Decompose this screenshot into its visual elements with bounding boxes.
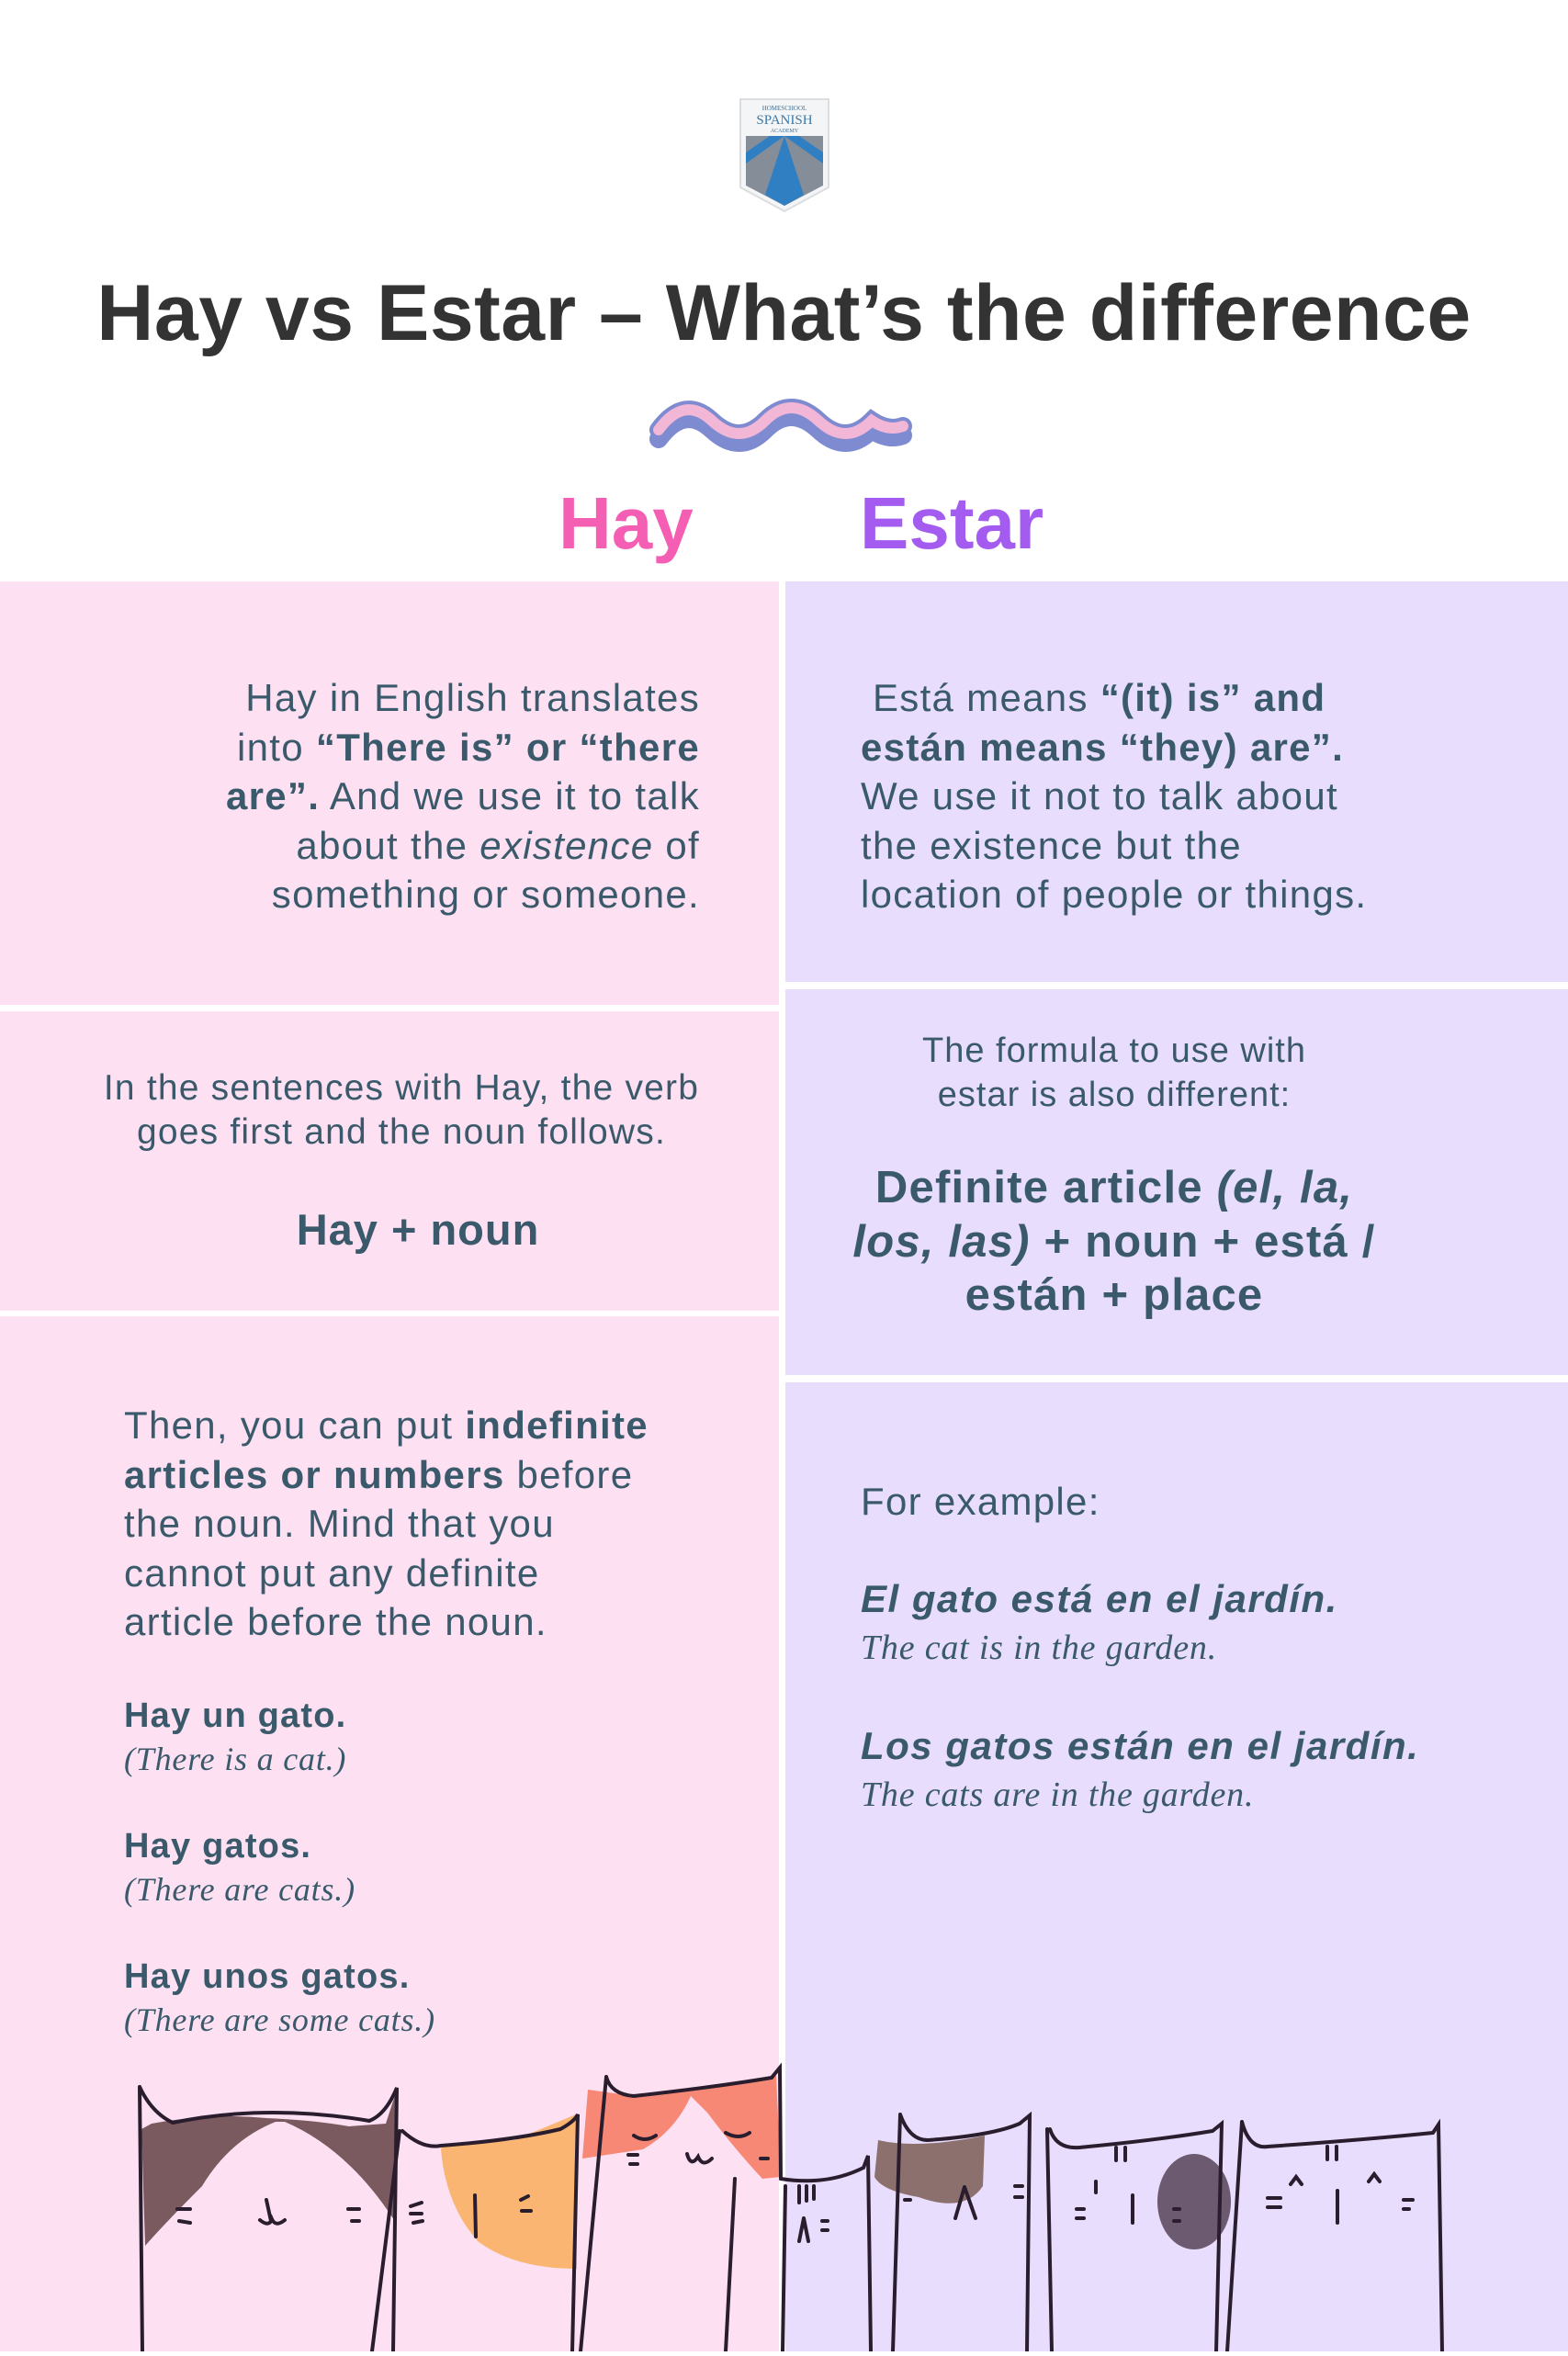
text: formula intro: estar is also different: [938, 1076, 1291, 1114]
cat 3 [582, 2076, 781, 2179]
cat 6 [1157, 2154, 1231, 2249]
example 1: The cat is in the garden. [861, 1629, 1217, 1667]
formula: hay + noun: Hay + noun [297, 1205, 539, 1254]
logo [739, 98, 829, 212]
example 2 [861, 1724, 1419, 1814]
text: indefinite articles: cannot put any definite [124, 1550, 540, 1595]
text: for example: For example: [861, 1480, 1100, 1523]
text: verb first: goes first and the noun follows. [137, 1112, 666, 1152]
panel: hay formula [0, 1011, 779, 1311]
text: verb first: In the sentences with Hay, the verb [104, 1068, 699, 1108]
text: indefinite articles: the noun. Mind that you [124, 1502, 555, 1545]
text: indefinite articles: articles or numbers before [124, 1453, 633, 1495]
heading: Hay: Hay [558, 482, 694, 564]
text: hay meaning [226, 676, 700, 916]
text: hay meaning: Hay in English translates [245, 676, 700, 719]
panel: estar examples [785, 1382, 1568, 2351]
cat 5 [874, 2136, 985, 2204]
text: hay meaning: something or someone. [272, 873, 700, 916]
panel: hay examples [0, 1316, 779, 2351]
example 2: Los gatos están en el jardín. [861, 1724, 1419, 1767]
text: hay meaning: about the existence of [296, 823, 700, 867]
panel: hay definition [0, 581, 779, 1005]
logo: SPANISH [756, 113, 813, 128]
example 2: Hay gatos. [124, 1827, 311, 1866]
example 2: (There are cats.) [124, 1871, 355, 1908]
text: formula intro [922, 1031, 1306, 1114]
text: indefinite articles: article before the noun. [124, 1600, 547, 1643]
cat 4 [781, 2156, 871, 2351]
heading: Estar: Estar [860, 482, 1043, 564]
formula: estar: están + place [965, 1270, 1263, 1320]
formula: estar [852, 1163, 1376, 1320]
title: Hay vs Estar – What’s the difference [96, 269, 1472, 357]
cat 7 [1227, 2122, 1442, 2351]
example 1: (There is a cat.) [124, 1741, 346, 1777]
cat 1 [140, 2090, 400, 2287]
panel: estar formula [785, 989, 1568, 1375]
example 3: (There are some cats.) [124, 2001, 435, 2038]
text: indefinite articles [124, 1403, 649, 1643]
example 1: Hay un gato. [124, 1697, 346, 1735]
example 2: The cats are in the garden. [861, 1775, 1254, 1814]
logo: HOMESCHOOL [762, 105, 807, 112]
text: hay meaning: are”. And we use it to talk [226, 774, 700, 817]
illustration: cats [138, 2063, 1444, 2351]
text: hay meaning: into “There is” or “there [237, 726, 700, 768]
example 1 [861, 1577, 1338, 1667]
text: estar meaning: the existence but the [861, 823, 1242, 867]
example 3: Hay unos gatos. [124, 1957, 410, 1996]
wave decoration [649, 399, 912, 452]
text: indefinite articles: Then, you can put indefinite [124, 1403, 649, 1447]
text: estar meaning: Está means “(it) is” and [873, 676, 1325, 719]
text: verb first [104, 1068, 699, 1152]
example 2 [124, 1827, 355, 1908]
text: estar meaning: We use it not to talk about [861, 774, 1338, 817]
text: estar meaning: location of people or things. [861, 873, 1367, 916]
text: estar meaning [861, 676, 1367, 916]
text: estar meaning: están means “they) are”. [861, 726, 1344, 768]
cat 2 [441, 2114, 577, 2269]
logo: ACADEMY [771, 129, 799, 134]
formula: estar: Definite article (el, la, [875, 1163, 1353, 1212]
example 1: El gato está en el jardín. [861, 1577, 1338, 1620]
formula: estar: los, las) + noun + está / [852, 1216, 1376, 1266]
panel: estar definition [785, 581, 1568, 982]
example 3 [124, 1957, 435, 2038]
text: formula intro: The formula to use with [922, 1031, 1306, 1070]
example 1 [124, 1697, 346, 1777]
